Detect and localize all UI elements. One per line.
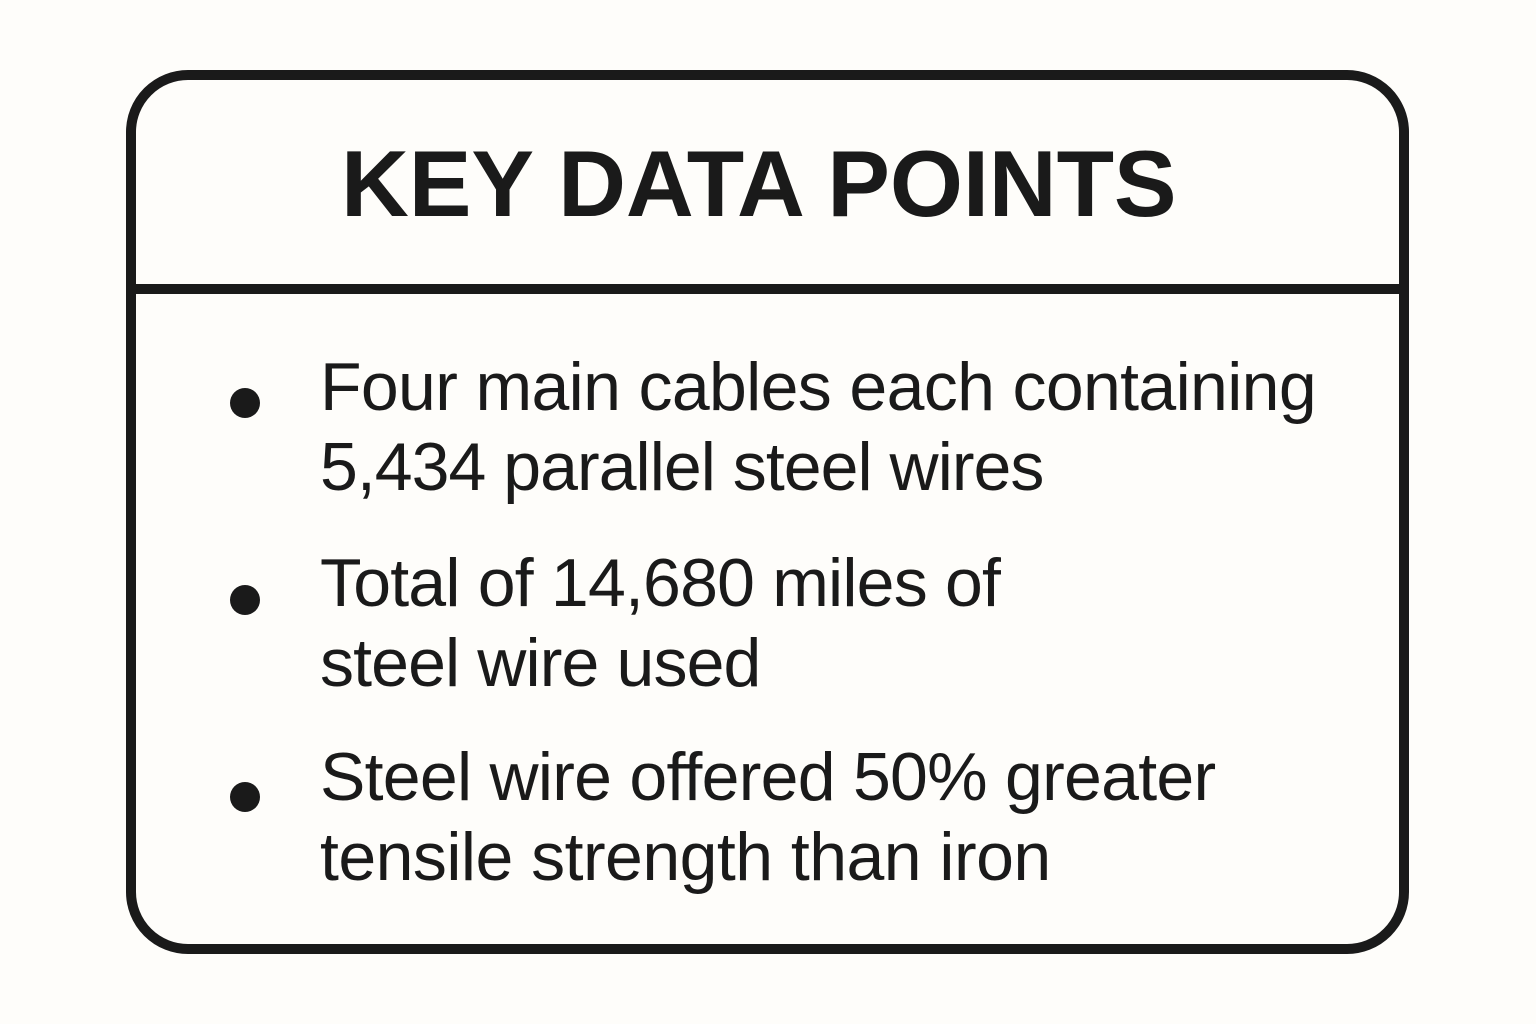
text: total steel wire: Total of 14,680 miles of [320, 545, 1000, 621]
divider under heading [130, 284, 1405, 294]
text: four main cables: Four main cables each containing [320, 349, 1316, 425]
text: tensile strength: tensile strength than iron [320, 819, 1051, 895]
text: tensile strength: Steel wire offered 50% greater [320, 739, 1215, 815]
text: four main cables [320, 349, 1316, 505]
text: total steel wire [320, 545, 1001, 701]
bullet 3 [230, 782, 260, 812]
bullet 2 [230, 585, 260, 615]
text: tensile strength [320, 739, 1215, 895]
text: four main cables: 5,434 parallel steel wires [320, 429, 1043, 505]
panel: key data points card [126, 70, 1409, 954]
heading: key data points: KEY DATA POINTS [341, 131, 1176, 236]
text: total steel wire: steel wire used [320, 625, 761, 701]
bullet 1 [230, 388, 260, 418]
